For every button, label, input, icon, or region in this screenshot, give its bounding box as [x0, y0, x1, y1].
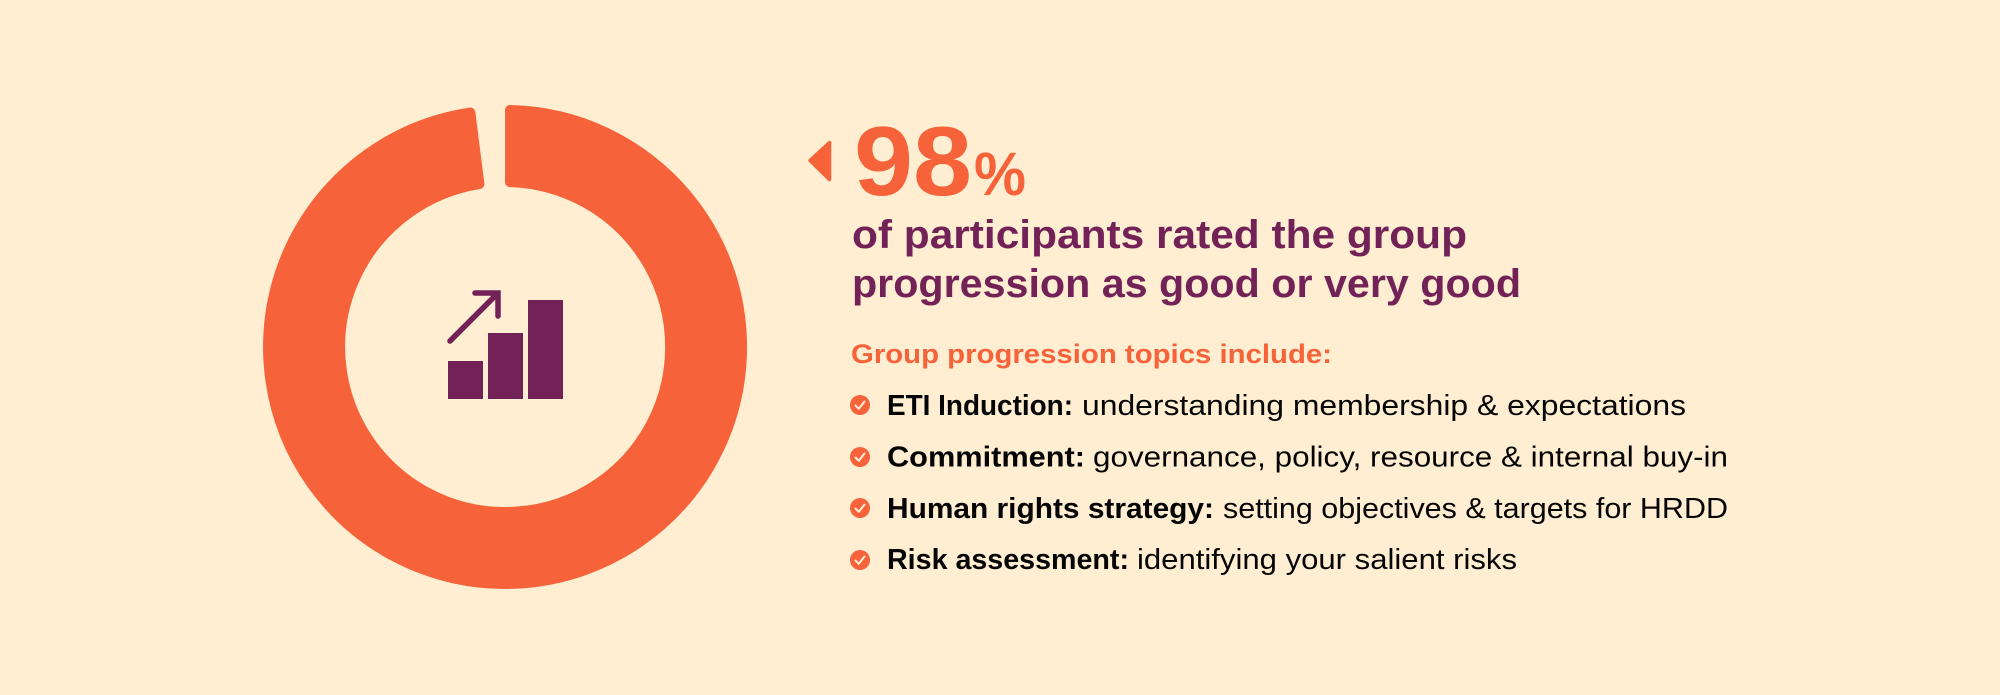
icon: left-pointing marker: [810, 142, 830, 180]
list item: Commitment: [850, 442, 1728, 474]
icon: rising bar chart with arrow: [448, 293, 563, 399]
list item: Human rights strategy: Human rights strategy:: [887, 493, 1214, 525]
subheading: [852, 213, 1521, 306]
list item: ETI Induction: [850, 390, 1686, 422]
list item: Risk assessment: Risk assessment:: [887, 544, 1129, 576]
headline statistic: 98%: 98: [854, 106, 972, 216]
list item: ETI Induction: understanding membership & expectations: [1082, 390, 1686, 422]
list item: Human rights strategy: setting objectives & targets for HRDD: [1223, 493, 1728, 525]
list item: Commitment: Commitment:: [887, 442, 1085, 474]
list of topics: [850, 390, 1728, 576]
list item: Risk assessment: identifying your salient risks: [1137, 544, 1517, 576]
list item: ETI Induction: ETI Induction:: [887, 390, 1073, 422]
list heading: Group progression topics include:: [851, 339, 1332, 369]
subheading: of participants rated the group: [852, 213, 1467, 257]
headline statistic: 98%: %: [974, 140, 1026, 208]
list item: Commitment: governance, policy, resource & internal buy-in: [1093, 442, 1728, 474]
subheading: progression as good or very good: [852, 262, 1521, 306]
list item: Human rights strategy: [850, 493, 1728, 525]
donut chart: 98%: [268, 110, 742, 584]
donut ring: [268, 110, 742, 584]
headline statistic: 98%: [854, 106, 1026, 216]
list item: Risk assessment: [850, 544, 1517, 576]
